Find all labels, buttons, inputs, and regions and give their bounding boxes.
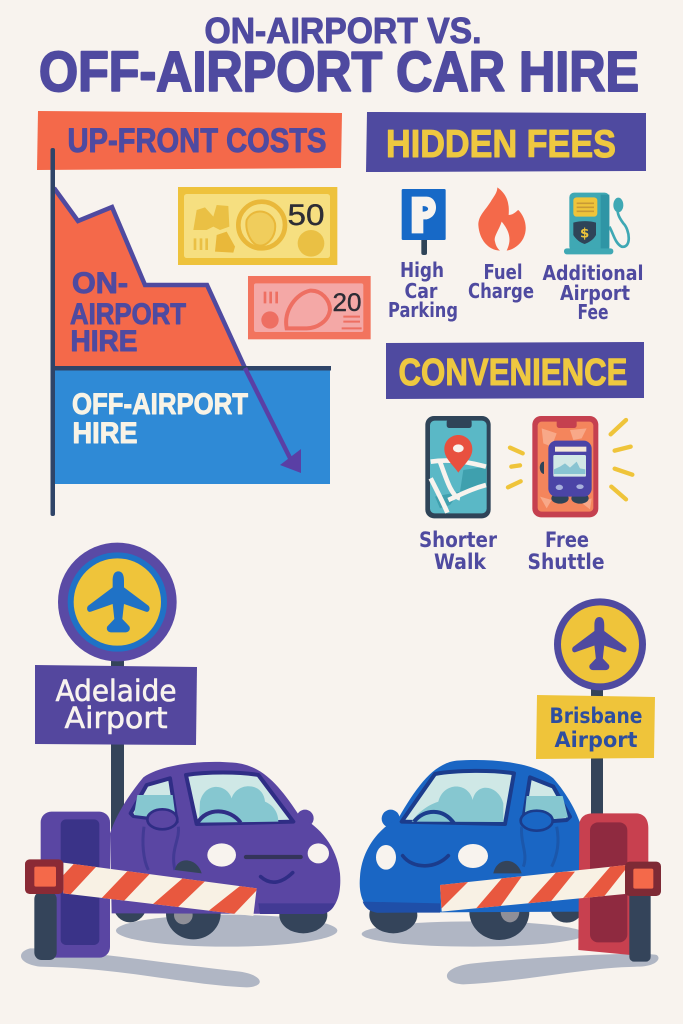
car: blue <box>360 760 585 940</box>
title <box>39 10 639 104</box>
ground shadows <box>21 915 337 987</box>
sign: Adelaide Airport <box>35 665 197 745</box>
heading: convenience: CONVENIENCE <box>398 352 628 394</box>
scene: Brisbane Airport <box>360 598 661 984</box>
label: high car parking: High <box>400 258 444 282</box>
icon: 50 banknote <box>178 187 337 265</box>
label: on-airport hire: AIRPORT <box>70 298 186 331</box>
icon: 50 banknote: 50 <box>288 199 324 232</box>
icon: parking sign <box>402 189 446 255</box>
heading: up-front costs <box>37 111 342 170</box>
sign: Adelaide Airport: Adelaide <box>56 674 176 708</box>
scene: Adelaide Airport <box>21 543 340 987</box>
label: high car parking: Parking <box>388 298 458 322</box>
label: on-airport hire: ON- <box>72 267 128 300</box>
panel: up-front costs <box>37 111 371 516</box>
label: additional airport fee: Additional <box>542 261 644 285</box>
title: ON-AIRPORT VS. <box>204 10 482 51</box>
ground shadows <box>362 921 659 984</box>
icon: map phone <box>425 416 491 518</box>
label: off-airport hire <box>72 388 248 450</box>
sign: Brisbane Airport: Brisbane <box>550 704 642 728</box>
label: fuel charge: Charge <box>468 279 534 303</box>
heading: convenience <box>386 342 644 399</box>
car: purple <box>110 762 340 939</box>
label: off-airport hire: OFF-AIRPORT <box>72 388 248 421</box>
label: shorter walk <box>419 528 498 574</box>
chart: cost comparison <box>50 148 331 516</box>
sign: Brisbane Airport <box>536 695 655 759</box>
heading: up-front costs: UP-FRONT COSTS <box>68 122 326 160</box>
label: high car parking: Car <box>404 279 438 303</box>
label: on-airport hire: HIRE <box>70 325 138 358</box>
label: free shuttle: Free <box>545 528 589 552</box>
label: additional airport fee: Fee <box>578 300 608 324</box>
icon: fuel flame <box>478 187 526 251</box>
sign: Brisbane Airport: Airport <box>554 728 638 752</box>
icon: fuel pump <box>564 193 629 254</box>
icon: shuttle signal rays <box>508 420 632 499</box>
panel: hidden fees <box>366 112 646 324</box>
label: fuel charge <box>468 260 534 303</box>
label: free shuttle <box>528 528 604 574</box>
icon: airport roundel <box>58 543 177 661</box>
barrier: Brisbane <box>437 813 661 962</box>
sign post <box>591 685 603 815</box>
icon: airport roundel <box>554 598 646 690</box>
label: on-airport hire <box>70 267 186 358</box>
label: shorter walk: Shorter <box>419 528 498 552</box>
heading: hidden fees: HIDDEN FEES <box>386 123 616 166</box>
label: high car parking <box>388 258 458 322</box>
label: shorter walk: Walk <box>434 550 487 574</box>
sign: Adelaide Airport: Airport <box>64 701 168 735</box>
label: fuel charge: Fuel <box>484 260 522 284</box>
label: additional airport fee: Airport <box>560 281 630 305</box>
label: free shuttle: Shuttle <box>528 550 604 574</box>
icon: fuel pump: $ <box>580 226 589 241</box>
barrier: Adelaide <box>25 812 263 960</box>
arrow: falling cost <box>245 368 301 473</box>
label: additional airport fee <box>542 261 644 324</box>
heading: hidden fees <box>366 112 646 172</box>
icon: 20 banknote <box>248 276 371 339</box>
icon: shuttle phone <box>532 416 598 517</box>
label: off-airport hire: HIRE <box>72 417 138 450</box>
panel: convenience <box>386 342 644 574</box>
icon: 20 banknote: 20 <box>332 289 362 317</box>
sign post <box>111 655 124 835</box>
